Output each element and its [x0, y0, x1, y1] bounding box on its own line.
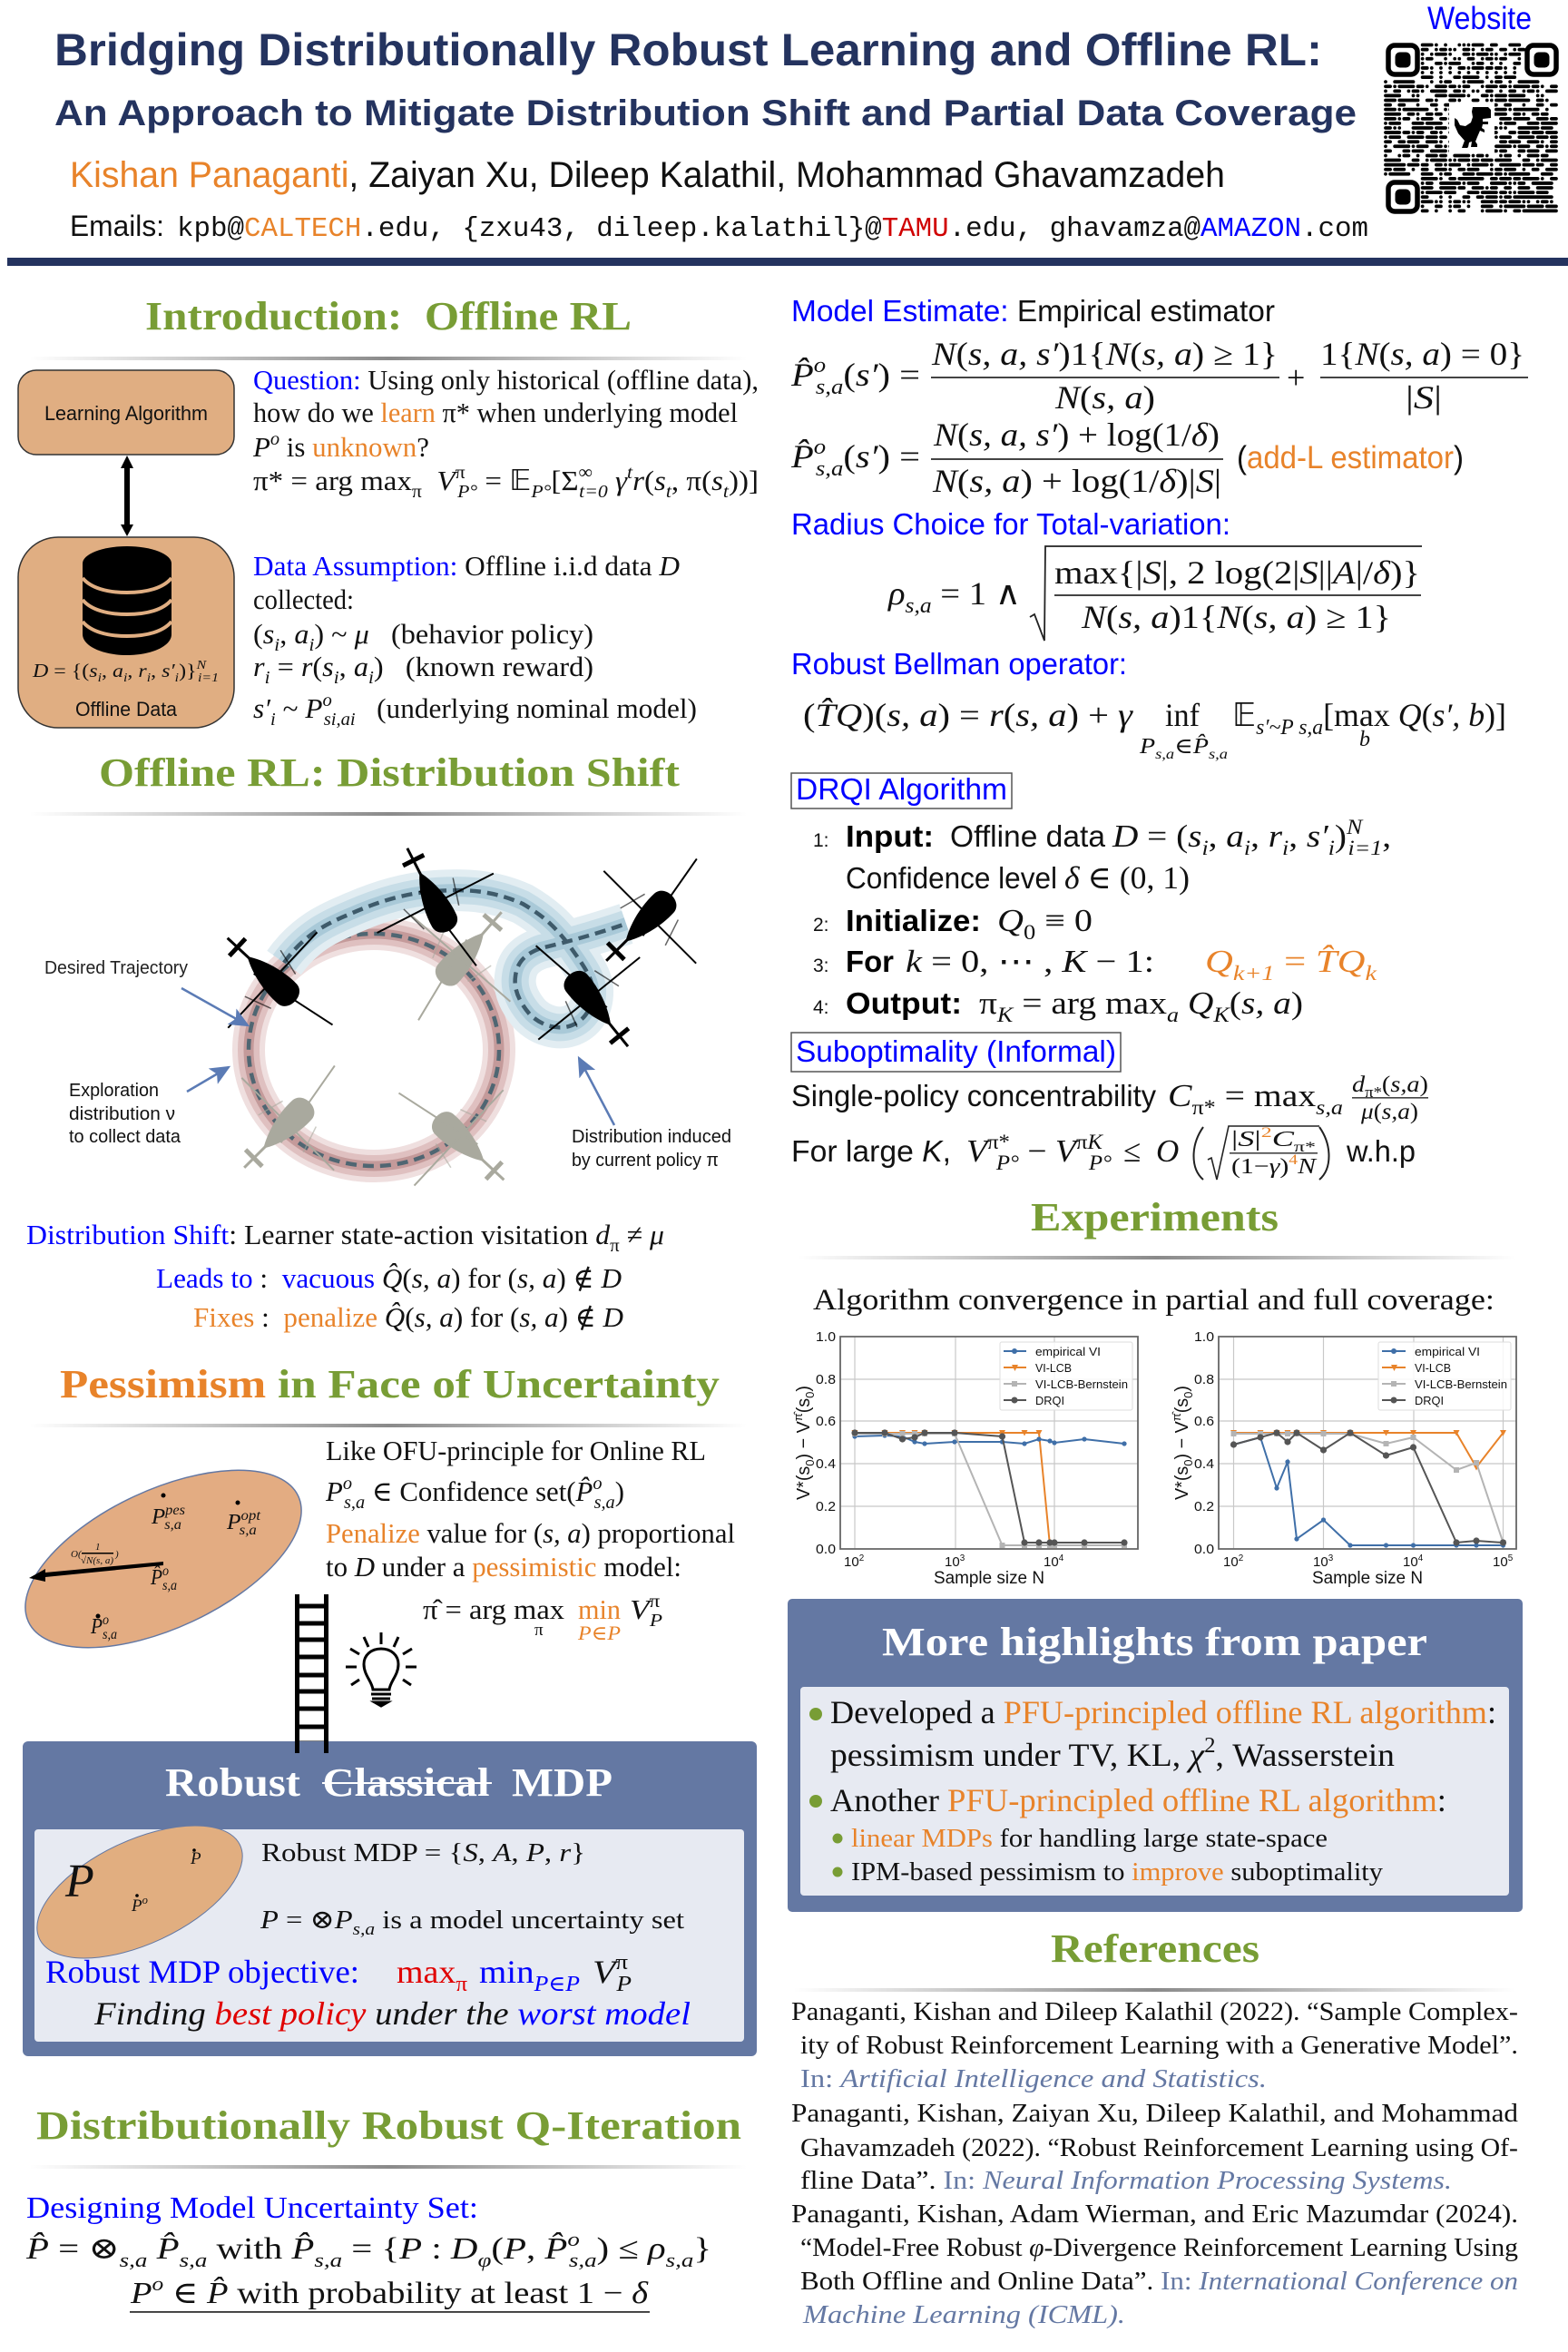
step 1: input: D = (si, ai, ri, s′i)Ni=1,	[1112, 815, 1391, 859]
axis labels: full coverage: 104	[1403, 1553, 1424, 1570]
arrow: exploration distribution	[187, 1067, 229, 1092]
panel: introduction	[18, 294, 759, 730]
legend: partial coverage: VI-LCB	[1035, 1361, 1072, 1375]
text: robust MDP objective: maxπ	[397, 1954, 467, 1996]
text: pessimism principle	[325, 1435, 735, 1583]
formula: pessimistic policy: π	[534, 1621, 544, 1640]
step 1: input: δ ∈ (0, 1)	[1064, 860, 1190, 896]
step 1: input: 1:	[813, 830, 829, 851]
legend: full coverage: VI-LCB	[1415, 1361, 1451, 1375]
icon: light bulb	[346, 1632, 416, 1706]
formula: bellman operator: 𝔼s′~P s,a[max Q(s′, b)]	[1232, 697, 1506, 740]
axis labels: full coverage	[1170, 1329, 1514, 1588]
panel: references	[791, 1926, 1518, 2329]
formula: empirical estimator: |S|	[1406, 379, 1442, 416]
QR code	[1386, 45, 1556, 211]
reference 1: ity of Robust Reinforcement Learning with a Generative Model”.	[800, 2032, 1518, 2060]
icon: black helicopters	[183, 818, 749, 1087]
step 1: input: Confidence level	[846, 861, 1057, 895]
reference 3: Machine Learning (ICML).	[802, 2301, 1125, 2329]
formula: uncertainty set: P̂ = ⊗ s,a P̂s,a with P̂s,a = { P : Dφ(P, P̂os,a) ≤ ρs,a}	[25, 2228, 711, 2271]
formula: empirical estimator	[790, 336, 1528, 416]
formula: pessimistic policy: Vπ P	[630, 1592, 662, 1631]
text: data assumption: Data Assumption: Offline i.i.d data D	[253, 550, 680, 582]
website link label: Website	[1427, 1, 1532, 36]
legend: full coverage: DRQI	[1415, 1394, 1444, 1407]
axis labels: partial coverage: V*(s0) − Vπ̂(s0)	[791, 1386, 817, 1500]
step 4: output: 4:	[813, 997, 829, 1018]
reference 2: Panaganti, Kishan, Zaiyan Xu, Dileep Kalathil, and Mohammad	[791, 2100, 1518, 2128]
text: robust MDP objective: VπP	[593, 1951, 632, 1996]
heading: robust classical MDP: Robust Classical MDP	[165, 1760, 612, 1805]
text: data assumption	[253, 550, 697, 730]
axis labels: partial coverage: 0.8	[816, 1372, 836, 1387]
formula: pessimistic policy: π̂ = arg max	[423, 1593, 565, 1625]
formula: single-policy concentrability: dπ*(s,a)	[1352, 1073, 1428, 1101]
icon: database	[83, 546, 172, 655]
step 1: input	[813, 815, 1391, 896]
axis labels: full coverage: 0.8	[1194, 1372, 1214, 1387]
label: induced distribution	[572, 1127, 731, 1171]
text: question: π* = arg max π Vπ P° = 𝔼P°[Σ∞ t=0 γtr(st, π(st))]	[253, 463, 759, 502]
authors: Kishan Panaganti, Zaiyan Xu, Dileep Kalathil, Mohammad Ghavamzadeh	[70, 155, 1225, 195]
step 3: for loop: k = 0, ⋯ , K − 1:	[906, 944, 1154, 979]
formula: radius: N(s, a)1{N(s, a) ≥ 1}	[1081, 599, 1391, 635]
heading: suboptimality box: Suboptimality (Informal)	[796, 1034, 1116, 1068]
text: chart caption: Algorithm convergence in partial and full coverage:	[813, 1284, 1494, 1317]
text: distribution shift explanation: Leads to : vacuous Q̂(s, a) for (s, a) ∉ D	[156, 1262, 622, 1294]
diagram: confidence set ellipse: )	[114, 1549, 119, 1560]
subtitle: An Approach to Mitigate Distribution Shift and Partial Data Coverage	[54, 93, 1357, 133]
label: exploration distribution	[69, 1081, 181, 1147]
formula: single-policy concentrability: μ(s,a)	[1360, 1100, 1418, 1124]
emails: Emails:	[70, 210, 164, 242]
reference 3: Both Offline and Online Data”. In: International Conference on	[800, 2268, 1518, 2296]
formula: bellman operator: Ps,a∈P̂ s,a	[1139, 734, 1228, 762]
diagram: helicopter trajectories	[44, 818, 749, 1228]
formula: probability statement: Po ∈ P̂ with probability at least 1 − δ	[130, 2272, 649, 2310]
diagram: uncertainty set ellipse	[17, 1798, 262, 1985]
heading: DRQI algorithm box: DRQI Algorithm	[796, 772, 1007, 806]
text: data assumption: collected:	[253, 583, 354, 615]
label: desired trajectory: Desired Trajectory	[44, 958, 188, 978]
formula: suboptimality bound: For large K,	[791, 1134, 951, 1168]
box: offline data: D = {( si, ai, ri, s′i)}N i=1	[32, 658, 219, 684]
reference 1: In: Artificial Intelligence and Statistics.	[800, 2065, 1267, 2093]
text: distribution shift explanation: Fixes : penalize Q̂(s, a) for (s, a) ∉ D	[193, 1301, 623, 1333]
legend: partial coverage	[1000, 1342, 1132, 1410]
text: data assumption: (si, ai) ~ μ (behavior policy)	[253, 618, 593, 655]
text: distribution shift explanation: Distribution Shift: Learner state-action visitation dπ ≠ μ	[26, 1219, 664, 1256]
text: robust MDP objective: minP∈P	[479, 1954, 580, 1996]
formula: suboptimality bound: (1− γ)4N	[1231, 1152, 1318, 1179]
reference 2: Ghavamzadeh (2022). “Robust Reinforcement Learning using Of-	[800, 2134, 1518, 2162]
text: question: how do we learn π* when underlying model	[253, 397, 738, 428]
axis labels: partial coverage: 0.0	[816, 1542, 836, 1557]
step 1: input: Input:	[846, 819, 934, 853]
panel: DRQI algorithm	[791, 772, 1428, 1180]
text: question	[252, 364, 759, 502]
heading: distribution shift: Offline RL: Distribution Shift	[99, 750, 680, 795]
reference 2	[791, 2100, 1518, 2195]
axis labels: full coverage: 105	[1493, 1553, 1514, 1570]
axis labels: partial coverage: 1.0	[816, 1329, 836, 1345]
formula: empirical estimator: N(s, a)	[1054, 379, 1155, 416]
diagram: uncertainty set ellipse: P	[190, 1849, 201, 1868]
reference 1: Panaganti, Kishan and Dileep Kalathil (2022). “Sample Complex-	[791, 1998, 1518, 2026]
label: induced distribution: Distribution induced	[572, 1127, 731, 1147]
step 3: for loop	[813, 943, 1377, 985]
formula: empirical estimator: P̂os,a(s′) =	[790, 354, 920, 399]
text: robust MDP objective	[45, 1951, 632, 1996]
title block	[54, 24, 1368, 245]
formula: bellman operator: (T̂Q)(s, a) = r(s, a) + γ	[803, 697, 1133, 733]
axis labels: partial coverage: 104	[1044, 1553, 1064, 1570]
legend: partial coverage: empirical VI	[1035, 1345, 1101, 1358]
bullet: another: Another PFU-principled offline RL algorithm:	[830, 1782, 1446, 1818]
box: learning algorithm: Learning Algorithm	[44, 402, 208, 425]
text: model estimate: Model Estimate: Empirical estimator	[791, 294, 1275, 328]
heading: DRQI: Distributionally Robust Q-Iteration	[36, 2103, 741, 2148]
bullet: developed	[809, 1694, 1496, 1773]
diagram: confidence set ellipse: √N(s, a)	[81, 1555, 113, 1566]
formula: single-policy concentrability	[791, 1073, 1428, 1124]
step 2: initialize: Initialize:	[846, 904, 981, 937]
legend: full coverage: empirical VI	[1415, 1345, 1480, 1358]
formula: radius: ρs,a = 1 ∧	[887, 575, 1021, 618]
axis labels: full coverage: 0.0	[1194, 1542, 1214, 1557]
panel: more highlights	[788, 1599, 1523, 1912]
formula: pessimistic policy	[423, 1592, 662, 1644]
formula: add-L estimator: P̂os,a(s′) =	[790, 436, 920, 481]
box: offline data: Offline Data	[75, 698, 178, 720]
legend: partial coverage: DRQI	[1035, 1394, 1064, 1407]
text: pessimism principle: Penalize value for (s, a) proportional	[326, 1517, 735, 1549]
formula: bellman operator: inf	[1165, 697, 1200, 733]
heading: pessimism: Pessimism in Face of Uncertainty	[60, 1362, 720, 1406]
arrow: between algorithm and data	[121, 456, 133, 536]
step 2: initialize: 2:	[813, 915, 829, 936]
step 3: for loop: 3:	[813, 956, 829, 976]
step 2: initialize	[813, 903, 1093, 944]
formula: bellman operator	[803, 697, 1506, 762]
step 1: input: Offline data	[950, 819, 1106, 853]
axis labels: partial coverage: 0.4	[816, 1456, 836, 1472]
reference 3	[791, 2200, 1518, 2329]
axis labels: partial coverage: 103	[945, 1553, 965, 1570]
text: robust bellman operator: Robust Bellman operator:	[791, 647, 1127, 681]
formula: add-L estimator	[790, 416, 1464, 499]
step 4: output: Output:	[846, 986, 962, 1020]
text: question: Question: Using only historical (offline data),	[253, 364, 759, 396]
formula: pessimistic policy: min	[578, 1593, 621, 1625]
heading: experiments: Experiments	[1031, 1195, 1279, 1240]
axis labels: partial coverage: 0.6	[816, 1414, 836, 1429]
text: pessimism principle: Po s,a ∈ Confidence set(P̂o s,a)	[325, 1474, 624, 1513]
panel: pessimism	[0, 1362, 747, 1753]
header rule	[7, 258, 1568, 266]
axis labels: full coverage: 0.6	[1194, 1414, 1214, 1429]
formula: bellman operator: b	[1359, 728, 1370, 751]
formula: suboptimality bound: O	[1156, 1133, 1179, 1169]
diagram: confidence set ellipse: O(	[71, 1549, 83, 1560]
formula: suboptimality bound: ≤	[1123, 1133, 1141, 1169]
formula: radius: max{| S|, 2 log(2| S||A|/δ)}	[1054, 554, 1420, 591]
text: pessimism principle: to D under a pessimistic model:	[326, 1551, 681, 1583]
text: distribution shift explanation	[26, 1219, 664, 1333]
axis labels: partial coverage	[791, 1329, 1064, 1588]
diagram: confidence set ellipse: Ppes s,a	[151, 1503, 185, 1533]
axis labels: full coverage: 102	[1223, 1553, 1243, 1570]
panel: robust MDP	[17, 1741, 757, 2056]
legend: partial coverage: VI-LCB-Bernstein	[1035, 1377, 1128, 1391]
text: model uncertainty set: P = ⊗Ps,a is a model uncertainty set	[260, 1906, 684, 1939]
heading: references: References	[1051, 1926, 1259, 1971]
axis labels: full coverage: V*(s0) − Vπ̂(s0)	[1170, 1386, 1195, 1500]
arrow: induced distribution	[579, 1058, 614, 1125]
text: question: Po is unknown?	[252, 429, 429, 463]
axis labels: full coverage: 1.0	[1194, 1329, 1214, 1345]
text: robust MDP definition: Robust MDP = { S, A, P, r}	[261, 1838, 585, 1867]
icon: grey helicopters	[198, 869, 551, 1228]
panel: distributionally robust Q-iteration	[25, 2103, 747, 2313]
axis labels: partial coverage: 102	[844, 1553, 864, 1570]
diagram: confidence set ellipse	[0, 1434, 328, 1684]
bullet: developed: pessimism under TV, KL, χ2, Wasserstein	[830, 1734, 1395, 1773]
text: pessimism principle: Like OFU-principle for Online RL	[326, 1435, 706, 1466]
arrow: desired trajectory	[181, 988, 248, 1025]
label: exploration distribution: distribution ν	[69, 1104, 175, 1124]
legend: full coverage: VI-LCB-Bernstein	[1415, 1377, 1507, 1391]
formula: add-L estimator: N(s, a) + log(1/ δ)|S|	[932, 463, 1221, 499]
diagram: confidence set ellipse: P̂o s,a	[150, 1563, 177, 1593]
label: exploration distribution: Exploration	[69, 1081, 159, 1101]
label: induced distribution: by current policy π	[572, 1151, 719, 1171]
axis labels: full coverage: Sample size N	[1312, 1569, 1423, 1588]
diagram: confidence set ellipse: Popt s,a	[226, 1508, 261, 1538]
box: learning algorithm	[18, 370, 234, 455]
sub-bullet: linear MDPs: linear MDPs for handling large state-space	[851, 1824, 1328, 1853]
step 3: for loop: For	[846, 945, 894, 978]
axis labels: full coverage: 103	[1313, 1553, 1334, 1570]
heading: more highlights: More highlights from paper	[882, 1620, 1427, 1664]
text: data assumption: ri = r(si, ai) (known reward)	[253, 651, 593, 688]
panel: model estimate	[790, 294, 1528, 762]
reference 3: Panaganti, Kishan, Adam Wierman, and Eric Mazumdar (2024).	[791, 2200, 1518, 2229]
text: designing model uncertainty set: Designing Model Uncertainty Set:	[26, 2191, 478, 2225]
text: radius choice: Radius Choice for Total-variation:	[791, 507, 1230, 541]
reference 2: fline Data”. In: Neural Information Processing Systems.	[800, 2167, 1452, 2195]
axis labels: partial coverage: Sample size N	[934, 1569, 1044, 1588]
icon: ladder	[297, 1594, 327, 1753]
panel: experiments	[791, 1195, 1516, 1588]
formula: add-L estimator: (add-L estimator)	[1237, 440, 1464, 475]
emails: kpb@CALTECH.edu, {zxu43, dileep.kalathil}@TAMU.edu, ghavamza@AMAZON.com	[177, 213, 1368, 245]
formula: single-policy concentrability: Single-policy concentrability	[791, 1079, 1156, 1112]
formula: empirical estimator: 1{N(s, a) = 0}	[1320, 336, 1524, 372]
reference 3: “Model-Free Robust φ-Divergence Reinforcement Learning Using	[800, 2234, 1518, 2262]
step 2: initialize: Q0 ≡ 0	[997, 903, 1093, 944]
diagram: uncertainty set ellipse: P	[64, 1856, 94, 1907]
label: exploration distribution: to collect data	[69, 1127, 181, 1147]
formula: add-L estimator: N(s, a, s′) + log(1/ δ)	[933, 416, 1220, 453]
axis labels: full coverage: 0.2	[1194, 1499, 1214, 1514]
heading: introduction: Introduction: Offline RL	[145, 294, 632, 338]
formula: single-policy concentrability: Cπ* = max s,a	[1168, 1078, 1343, 1119]
formula: pessimistic policy: P∈P	[577, 1622, 621, 1644]
bullet: developed: Developed a PFU-principled offline RL algorithm:	[830, 1694, 1496, 1730]
step 4: output	[813, 985, 1303, 1026]
step 4: output: πK = arg max a QK(s, a)	[979, 985, 1303, 1026]
sub-bullet: IPM pessimism: IPM-based pessimism to improve suboptimality	[851, 1857, 1384, 1886]
reference 1	[791, 1998, 1518, 2093]
legend: full coverage	[1378, 1342, 1511, 1410]
formula: empirical estimator: N(s, a, s′ )1{N(s, a) ≥ 1}	[931, 336, 1278, 372]
axis labels: partial coverage: 0.2	[816, 1499, 836, 1514]
diagram: confidence set ellipse: Po s,a	[90, 1612, 117, 1642]
main title: Bridging Distributionally Robust Learning and Offline RL:	[54, 24, 1322, 75]
diagram: uncertainty set ellipse: Po	[131, 1894, 148, 1916]
text: finding best policy: Finding best policy under the worst model	[93, 1995, 691, 2032]
text: robust MDP objective: Robust MDP objective:	[45, 1954, 359, 1990]
formula: suboptimality bound: w.h.p	[1346, 1134, 1416, 1168]
diagram: confidence set ellipse: 1	[95, 1542, 100, 1553]
formula: radius	[887, 546, 1422, 641]
chart: partial coverage	[791, 1329, 1138, 1588]
panel: distribution shift	[26, 750, 749, 1333]
formula: empirical estimator: +	[1287, 359, 1305, 396]
box: offline data	[18, 537, 234, 728]
formula: suboptimality bound: |S |2C π*	[1231, 1125, 1316, 1155]
axis labels: full coverage: 0.4	[1194, 1456, 1214, 1472]
chart: full coverage	[1170, 1329, 1516, 1588]
formula: suboptimality bound	[791, 1125, 1416, 1180]
text: data assumption: s′i ~ Po si,ai (underlying nominal model)	[253, 691, 697, 730]
formula: suboptimality bound: Vπ*P° − VπKP°	[966, 1130, 1112, 1174]
step 3: for loop: Qk+1 = T̂Q k	[1205, 943, 1377, 985]
